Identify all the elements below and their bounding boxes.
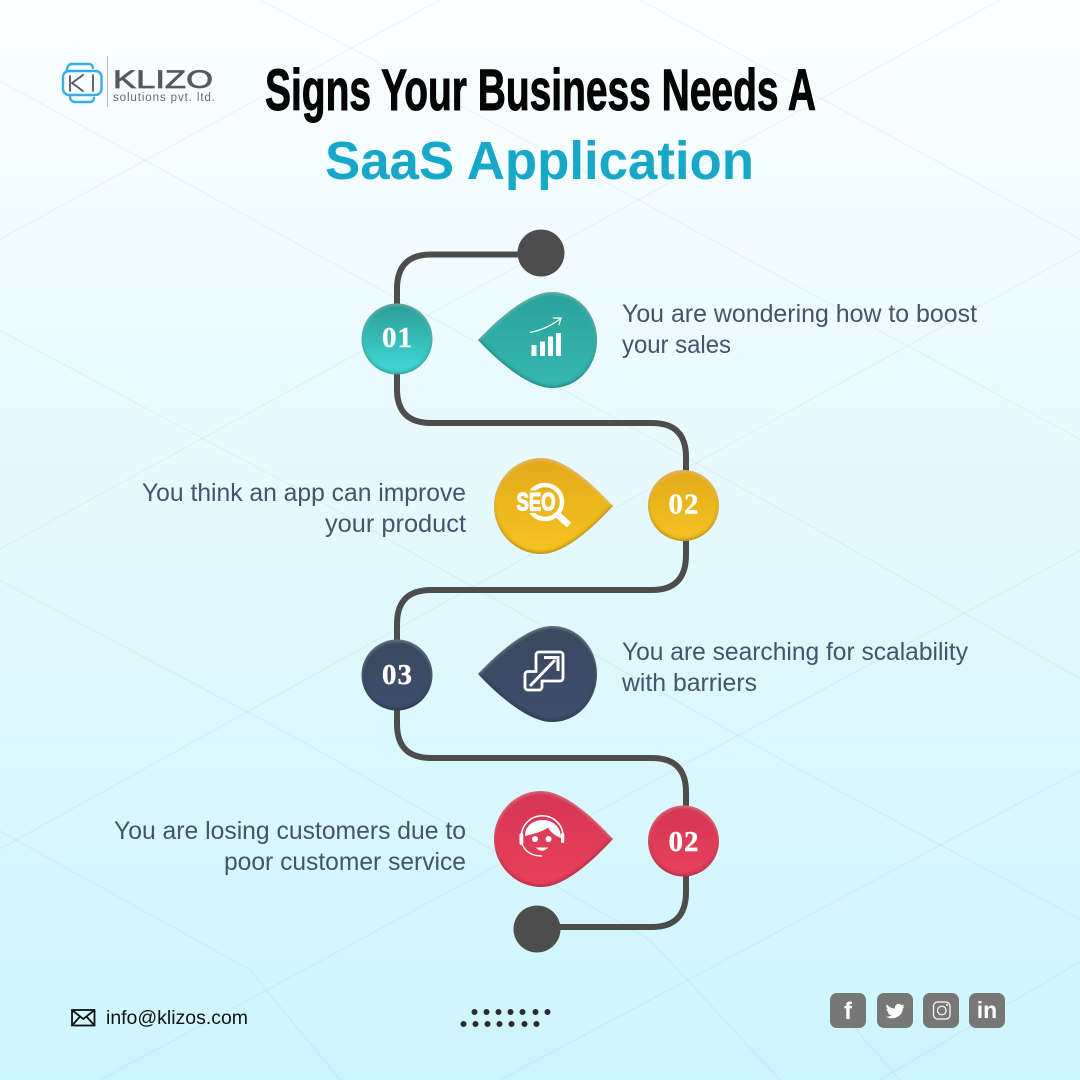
number badge 02: 02 <box>668 488 700 520</box>
step 02 text: You think an app can improve <box>142 479 466 507</box>
icon: facebook <box>830 993 866 1028</box>
title line 2: SaaS Application <box>325 131 754 191</box>
red drop with support agent icon <box>494 791 613 887</box>
step 01 <box>362 292 977 388</box>
path end dot <box>514 906 560 952</box>
email address: info@klizos.com <box>106 1008 248 1029</box>
number badge 03: 03 <box>382 659 413 691</box>
teal drop with chart icon <box>478 292 597 388</box>
step 03 <box>362 626 968 722</box>
number badge 04: 02 <box>668 826 700 858</box>
number badge 04 <box>648 806 719 876</box>
step 01 text <box>622 300 977 359</box>
step 01 text: your sales <box>622 331 731 359</box>
icon: facebook: f <box>844 998 853 1025</box>
step 04 <box>114 791 719 887</box>
step 02 text: your product <box>325 510 466 538</box>
title <box>265 58 816 191</box>
step 03 text <box>621 638 968 697</box>
step 02 text <box>142 479 466 538</box>
step 02 <box>142 458 719 554</box>
navy drop with scale icon <box>478 626 597 722</box>
path start dot <box>518 230 564 276</box>
icon: envelope <box>72 1010 94 1026</box>
icon: linkedin <box>969 993 1005 1028</box>
icon: twitter <box>877 993 913 1028</box>
step 01 text: You are wondering how to boost <box>622 300 977 328</box>
number badge 02 <box>648 470 719 541</box>
step 04 text <box>114 817 466 876</box>
winding connector path <box>397 230 686 952</box>
logo: Klizo solutions <box>63 56 215 107</box>
number badge 01: 01 <box>382 322 413 354</box>
step 04 text: poor customer service <box>224 848 466 876</box>
logo icon <box>63 64 102 102</box>
number badge 03 <box>362 640 432 710</box>
title line 1: Signs Your Business Needs A <box>265 58 816 123</box>
icon: instagram <box>923 993 959 1028</box>
yellow drop with SEO icon: SEO <box>516 488 556 516</box>
step 03 text: You are searching for scalability <box>622 638 968 666</box>
social icons <box>830 993 1005 1028</box>
decorative dots <box>460 1009 550 1027</box>
email contact <box>72 1008 248 1029</box>
logo tagline: solutions pvt. ltd. <box>113 92 215 104</box>
logo wordmark: KLIZO <box>113 66 213 94</box>
step 03 text: with barriers <box>621 669 757 697</box>
icon: linkedin: in <box>977 997 997 1023</box>
yellow drop with SEO icon: SEO <box>516 488 556 516</box>
step 04 text: You are losing customers due to <box>114 817 466 845</box>
number badge 01 <box>362 304 432 374</box>
yellow drop with SEO icon <box>494 458 613 554</box>
